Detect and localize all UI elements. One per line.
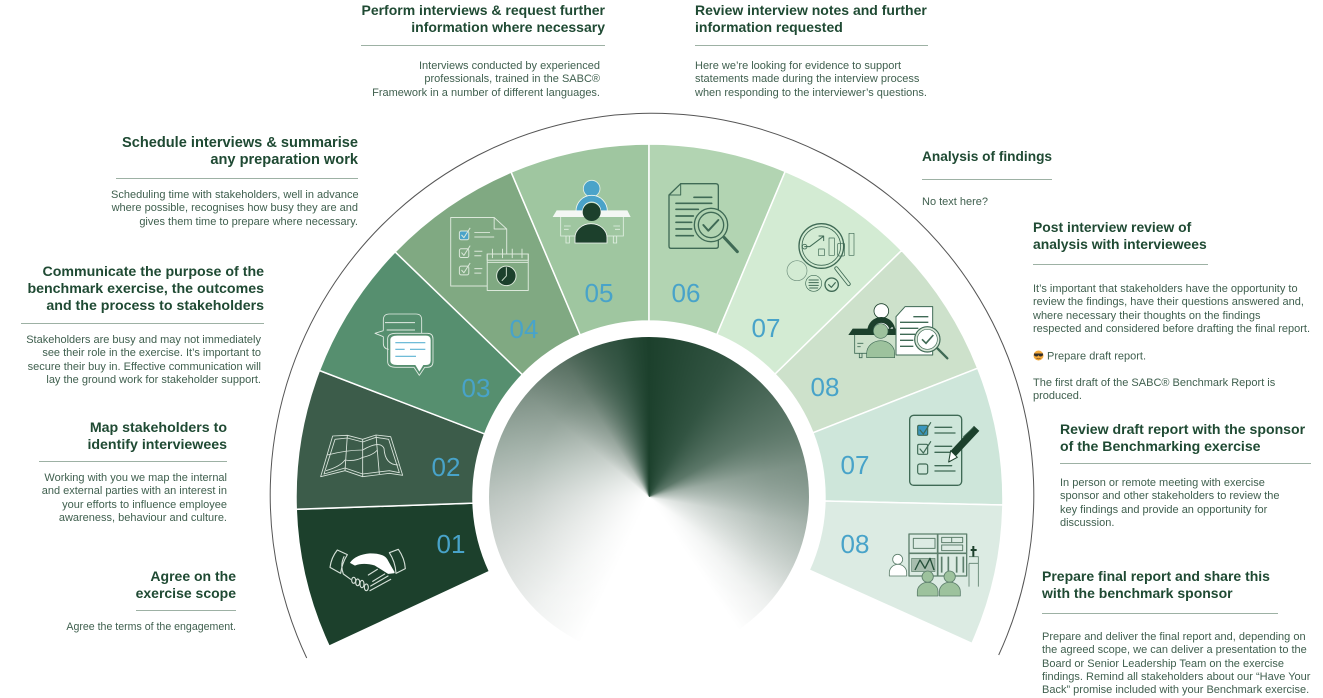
icon: document with magnifier xyxy=(668,183,739,254)
text: post interview review: where necessary their thoughts on the findings xyxy=(1033,310,1260,322)
text: prepare final report: Back” promise included with your Benchmark exercise. xyxy=(1042,684,1309,696)
segment numbers: 07 xyxy=(752,313,780,343)
segment numbers: 01 xyxy=(437,529,465,559)
text: review draft report: sponsor and other stakeholders to review the xyxy=(1060,490,1280,502)
segment 03 xyxy=(319,252,522,434)
text: agree exercise scope: exercise scope xyxy=(136,585,236,601)
text: perform interviews: Perform interviews & request further xyxy=(361,2,605,18)
icon: chat bubbles xyxy=(374,314,434,376)
segment 08 xyxy=(775,250,978,433)
segment 05 xyxy=(511,144,649,335)
text: map stakeholders: awareness, behaviour and culture. xyxy=(59,512,227,524)
text: review interview notes: information requested xyxy=(695,19,843,35)
segment numbers: 02 xyxy=(432,452,460,482)
text: post interview review: analysis with interviewees xyxy=(1033,236,1207,252)
text: post interview review xyxy=(1033,219,1310,402)
icon: analysis magnifier xyxy=(786,223,854,292)
text: review draft report: Review draft report with the sponsor xyxy=(1060,420,1305,436)
text: schedule interviews: Schedule interviews & summarise xyxy=(122,135,358,151)
text: perform interviews xyxy=(361,2,605,99)
segment 07 xyxy=(717,171,902,374)
text: review draft report xyxy=(1060,420,1311,529)
text: agree exercise scope xyxy=(66,568,236,633)
text: schedule interviews xyxy=(111,135,359,228)
segment numbers: 03 xyxy=(462,373,490,403)
text: communicate the purpose: Stakeholders are busy and may not immediately xyxy=(26,334,261,346)
text: review interview notes xyxy=(695,2,928,99)
text: communicate the purpose: Communicate the purpose of the xyxy=(42,264,264,280)
icon: map xyxy=(320,434,404,478)
segment numbers: 05 xyxy=(585,278,613,308)
icon: handshake xyxy=(329,548,406,592)
text: schedule interviews: Scheduling time with stakeholders, well in advance xyxy=(111,189,359,201)
text: map stakeholders: Working with you we map the internal xyxy=(44,472,227,484)
text: review interview notes: Here we’re looking for evidence to support xyxy=(695,60,901,72)
text: schedule interviews: where possible, recognises how busy they are and xyxy=(112,202,358,214)
centre gradient disc xyxy=(489,337,809,657)
text: post interview review: review the findings, have their questions answered and, xyxy=(1033,296,1304,308)
text: post interview review: respected and considered before drafting the final report. xyxy=(1033,323,1310,335)
segment numbers: 07 xyxy=(841,450,869,480)
text: review draft report: of the Benchmarking exercise xyxy=(1060,438,1261,454)
text: prepare final report: findings. Remind all stakeholders about our “Have Your xyxy=(1042,671,1310,683)
segment 08 lower xyxy=(809,501,1003,643)
text: prepare final report: Board or Senior Leadership Team on the exercise xyxy=(1042,658,1284,670)
text: post interview review: It’s important that stakeholders have the opportunity to xyxy=(1033,283,1298,295)
text: schedule interviews: gives them time to prepare where necessary. xyxy=(139,216,358,228)
segment 07 lower xyxy=(813,368,1003,505)
text: review draft report: key findings and provide an opportunity for xyxy=(1060,504,1267,516)
segment 04 xyxy=(395,172,580,375)
text: review draft report: discussion. xyxy=(1060,517,1114,529)
text: perform interviews: Framework in a number of different languages. xyxy=(372,87,600,99)
text: communicate the purpose: secure their buy in. Effective communication will xyxy=(28,361,261,373)
text: prepare final report: the agreed scope, we can deliver a presentation to the xyxy=(1042,644,1307,656)
text: post interview review: Post interview review of xyxy=(1033,219,1191,235)
text: map stakeholders: your efforts to influence employee xyxy=(62,499,227,511)
icon: interview person at desk xyxy=(552,180,630,244)
icon: checklist and pen xyxy=(909,414,980,486)
text: perform interviews: information where necessary xyxy=(411,19,605,35)
text: prepare final report: with the benchmark sponsor xyxy=(1042,585,1233,601)
segment numbers: 06 xyxy=(672,278,700,308)
text: review interview notes: statements made during the interview process xyxy=(695,73,919,85)
segment 01 xyxy=(296,503,490,646)
segment 02 xyxy=(296,370,485,509)
text: map stakeholders: Map stakeholders to xyxy=(90,420,227,436)
text: prepare final report xyxy=(1042,568,1310,696)
segment numbers: 08 xyxy=(811,372,839,402)
text: analysis of findings: No text here? xyxy=(922,196,988,208)
text: review draft report: In person or remote meeting with exercise xyxy=(1060,477,1265,489)
text: review interview notes: Review interview notes and further xyxy=(695,2,927,18)
icon: checklist and calendar xyxy=(450,217,529,291)
text: schedule interviews: any preparation work xyxy=(210,152,358,168)
text: communicate the purpose: benchmark exercise, the outcomes xyxy=(27,281,264,297)
text: post interview review: produced. xyxy=(1033,390,1082,402)
text: perform interviews: Interviews conducted by experienced xyxy=(419,60,600,72)
text: analysis of findings xyxy=(922,148,1052,208)
text: communicate the purpose: and the process to stakeholders xyxy=(46,298,264,314)
text: analysis of findings: Analysis of findings xyxy=(922,148,1052,164)
text: post interview review: Prepare draft report. xyxy=(1047,350,1146,362)
text: post interview review: The first draft of the SABC® Benchmark Report is xyxy=(1033,377,1275,389)
segment numbers: 08 xyxy=(841,529,869,559)
icon: reviewer and document xyxy=(848,303,948,360)
text: prepare final report: Prepare final report and share this xyxy=(1042,568,1270,584)
text: map stakeholders: and external parties with an interest in xyxy=(42,485,227,497)
text: agree exercise scope: Agree the terms of the engagement. xyxy=(66,621,236,633)
text: communicate the purpose xyxy=(21,264,264,386)
text: communicate the purpose: see their role in the exercise. It’s important to xyxy=(42,347,261,359)
text: perform interviews: professionals, trained in the SABC® xyxy=(424,73,600,85)
text: map stakeholders: identify interviewees xyxy=(87,437,227,453)
text: map stakeholders xyxy=(39,420,227,524)
text: agree exercise scope: Agree on the xyxy=(150,568,236,584)
segment 06 xyxy=(649,144,785,335)
text: review interview notes: when responding to the interviewer’s questions. xyxy=(695,87,927,99)
text: communicate the purpose: lay the ground work for stakeholder support. xyxy=(46,374,261,386)
text: prepare final report: Prepare and deliver the final report and, depending on xyxy=(1042,631,1306,643)
icon: presentation to board xyxy=(888,533,979,596)
segment numbers: 04 xyxy=(510,314,538,344)
